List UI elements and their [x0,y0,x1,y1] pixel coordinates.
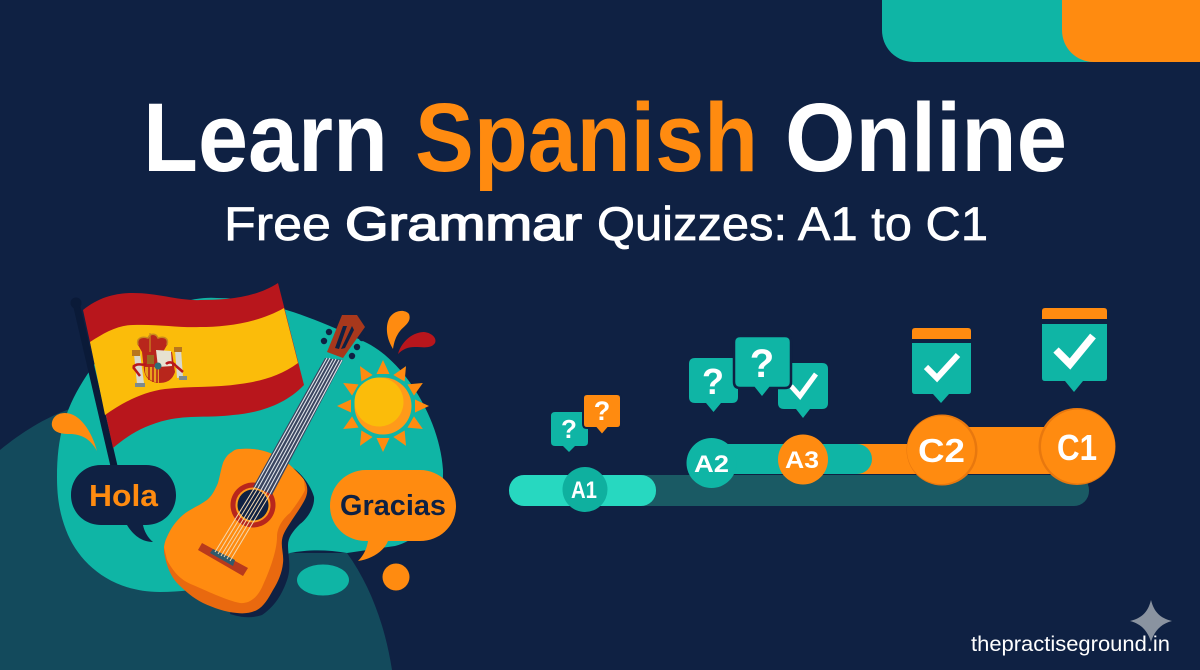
sound hole [238,490,268,520]
headstock [327,315,365,358]
A3 node [778,434,828,484]
title: Online [785,83,1067,192]
tuning pegs [321,320,365,359]
teal blob [57,298,443,592]
teal bar A2 to A3 [713,444,872,474]
sun [337,360,429,452]
flag red field [83,283,304,448]
subtitle: Quizzes: A1 to C1 [597,197,988,250]
shield stripes [145,367,159,383]
check bubble [778,363,828,418]
Spanish flag [83,283,304,448]
central medallion [154,362,162,370]
C1 node: C1 [1057,427,1097,468]
left pillar [132,350,145,387]
C1 node [1038,408,1116,485]
Gracias speech bubble: Gracias [340,490,446,522]
guitar [160,315,365,617]
check mark [1056,336,1093,364]
A1 quiz bubbles [551,394,621,452]
guitar body [164,449,307,613]
headstock slots [335,326,354,349]
A2 and A3 quiz bubbles [689,336,828,418]
illustration: Spanish culture [0,283,456,670]
orange tab [1062,0,1200,62]
sun disc [354,378,404,426]
small teal ellipse [297,564,349,596]
orange question bubble: ? [594,396,610,426]
castle quarter [147,355,154,364]
right pillar [174,347,187,380]
Hola speech bubble [71,465,176,542]
subtitle: Grammar [345,197,582,250]
A2 node [686,438,736,488]
guitar shadow [230,468,314,617]
icon: sparkle star [1130,600,1172,642]
left question bubble: ? [702,361,724,402]
sound hole ring [230,482,276,528]
red splash top right [398,332,436,354]
A3 node: A3 [785,447,819,474]
strings on neck [255,358,342,494]
Gracias speech bubble [330,470,456,561]
website credit: thepractiseground.in [971,633,1170,656]
C2 node [906,414,978,486]
flag yellow band [90,308,298,415]
C2 quiz card [912,328,971,403]
orange splash left [52,413,97,451]
sun disc shade [354,378,412,434]
C2 node: C2 [918,432,965,469]
check mark [926,355,958,378]
orange splash top right [387,311,410,349]
dark teal backdrop blob [0,406,392,670]
strings over body [215,487,270,561]
subtitle: Free [224,197,331,250]
shield [142,352,175,383]
sun rays [337,360,429,452]
A1 node [562,467,608,512]
orange dot [382,564,410,590]
orange bar A3 to C2 [850,444,930,474]
Hola speech bubble: Hola [89,478,159,513]
card header [912,328,971,339]
shield quarter [156,350,172,367]
orange bar C2 to C1 [960,427,1060,474]
coat of arms [132,333,187,387]
card header [1042,308,1107,319]
center question bubble: ? [750,342,774,386]
title [143,83,1067,192]
neck [253,358,343,495]
card body [912,343,971,403]
A1 node: A1 [571,477,597,504]
subtitle [224,197,988,250]
C1 quiz card [1042,308,1107,392]
title: Spanish [415,83,758,192]
saddle [210,549,235,566]
bridge [198,543,248,576]
A1 light bar [509,475,656,506]
guitar body highlight [160,440,305,603]
A2 node: A2 [694,451,729,478]
title: Learn [143,83,388,192]
crown [138,333,167,352]
level progress chart [509,308,1116,512]
teal question bubble: ? [561,414,577,444]
card body [1042,324,1107,392]
sun teal ring [352,374,414,438]
dark track [600,475,1089,506]
teal tab [882,0,1100,62]
ribbons [133,362,183,376]
flag pole [70,298,114,466]
top-right corner tabs [882,0,1200,62]
